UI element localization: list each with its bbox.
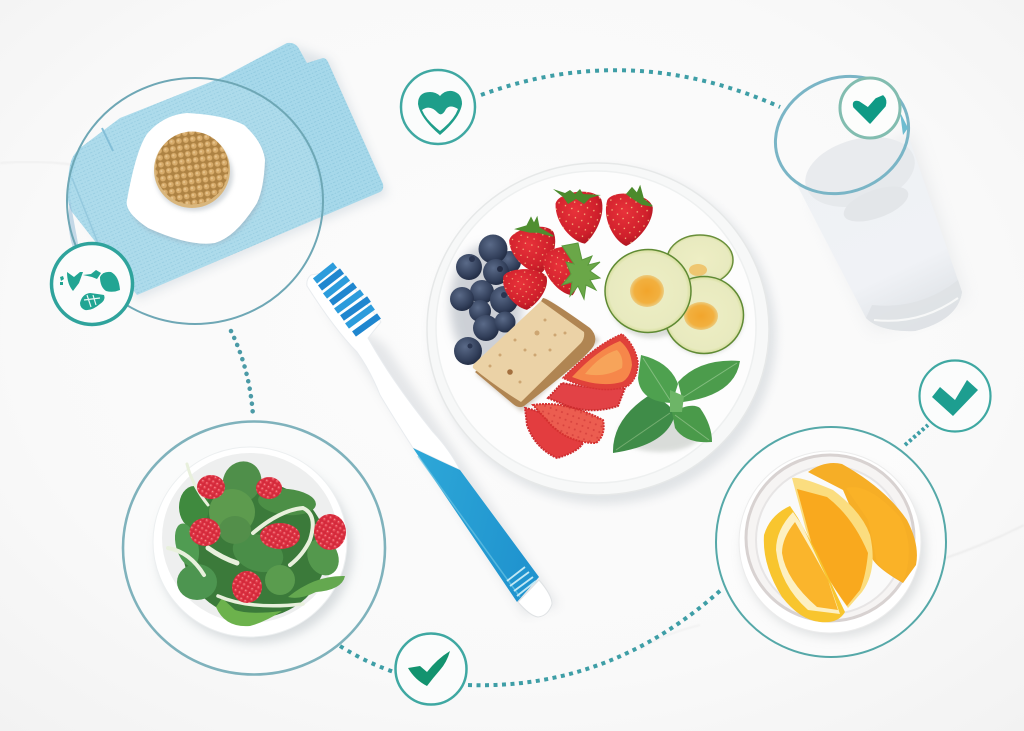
cucumber slices (605, 235, 744, 355)
salad greens (171, 455, 345, 626)
heart badge (401, 70, 475, 144)
right wedge (808, 463, 917, 583)
cracker (473, 298, 600, 412)
bristle pad (154, 132, 230, 208)
dotted connector: salad to bottom check (340, 646, 394, 672)
grip stripes (507, 567, 536, 596)
dotted connector: shrimp circle to salad (231, 331, 253, 416)
left wedge (764, 506, 845, 622)
lens ring around soap (67, 76, 323, 326)
strawberry leaves (562, 243, 600, 299)
glass body (797, 135, 962, 331)
blue towel (67, 43, 388, 300)
heart check badge (840, 78, 908, 138)
dotted connector: heart badge to glass (481, 70, 780, 107)
icon: heart check (854, 96, 886, 123)
blue grip (413, 448, 539, 602)
middle wedge (792, 478, 873, 608)
dotted connector: bottom check to orange bowl (468, 589, 722, 685)
check badge right (920, 360, 990, 432)
salad bowl ring (123, 422, 385, 674)
strawberries (503, 187, 655, 310)
orange bowl ring (716, 427, 946, 657)
shrimp icon badge (52, 244, 132, 324)
brush head and neck (307, 270, 460, 470)
water surface (797, 126, 923, 218)
salad bowl (153, 447, 353, 643)
mint leaves (613, 355, 740, 453)
orange bowl (739, 451, 926, 638)
strawberry slices (525, 334, 638, 458)
fennel strips (168, 464, 313, 606)
icon: heart (418, 91, 462, 135)
orange wedges (764, 463, 917, 622)
icon: check mark (932, 380, 978, 416)
dotted connector: orange bowl to right check (905, 425, 928, 445)
raspberries (190, 475, 346, 603)
dinner plate (427, 163, 776, 504)
glass rim (758, 57, 926, 213)
water glass (758, 57, 965, 331)
icon: brush check (408, 651, 450, 686)
bristles (315, 265, 379, 334)
check badge bottom (396, 634, 466, 704)
seafood icons (60, 270, 120, 310)
toothbrush (307, 265, 558, 617)
white soap dish with bristle pad (127, 113, 266, 245)
handle tip (518, 580, 552, 617)
blueberries (450, 234, 522, 365)
